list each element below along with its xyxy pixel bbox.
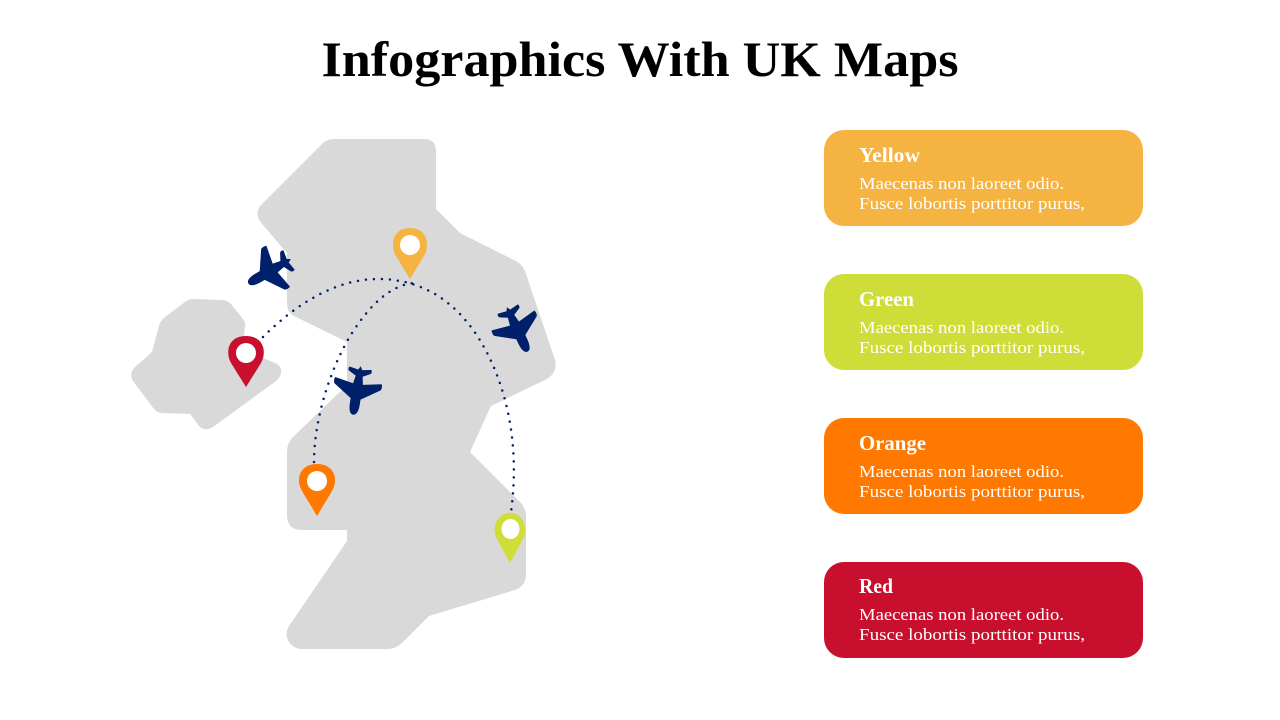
card: orange: Orange: [859, 431, 926, 455]
dotted flight routes: [263, 279, 514, 512]
route: orange pin to yellow pin: [314, 283, 414, 462]
plane: upper left: [236, 238, 303, 304]
pin: yellow: [393, 228, 427, 279]
card: green: Fusce lobortis porttitor purus,: [859, 338, 1085, 357]
title: Infographics With UK Maps: [322, 31, 958, 87]
card: green: Maecenas non laoreet odio.: [859, 318, 1064, 337]
plane: upper right: [485, 297, 549, 362]
card: orange: Fusce lobortis porttitor purus,: [859, 482, 1085, 501]
card: red: [824, 562, 1143, 658]
card: red: Fusce lobortis porttitor purus,: [859, 625, 1085, 644]
plane: centre: [329, 363, 385, 418]
card: red: Maecenas non laoreet odio.: [859, 605, 1064, 624]
map region: Great Britain: [258, 139, 556, 649]
card: red: Red: [859, 574, 893, 598]
card: yellow: Fusce lobortis porttitor purus,: [859, 194, 1085, 213]
pin: red: [228, 336, 264, 387]
map region: Ireland: [131, 299, 281, 429]
route: red pin to green pin: [263, 279, 514, 512]
card: orange: [824, 418, 1143, 514]
map of the UK: [131, 139, 556, 649]
card: yellow: [824, 130, 1143, 226]
card: yellow: Yellow: [859, 143, 921, 167]
pin: orange: [299, 464, 335, 516]
pin: green: [495, 513, 525, 563]
card: green: Green: [859, 287, 914, 311]
card: yellow: Maecenas non laoreet odio.: [859, 174, 1064, 193]
card: green: [824, 274, 1143, 370]
card: orange: Maecenas non laoreet odio.: [859, 462, 1064, 481]
